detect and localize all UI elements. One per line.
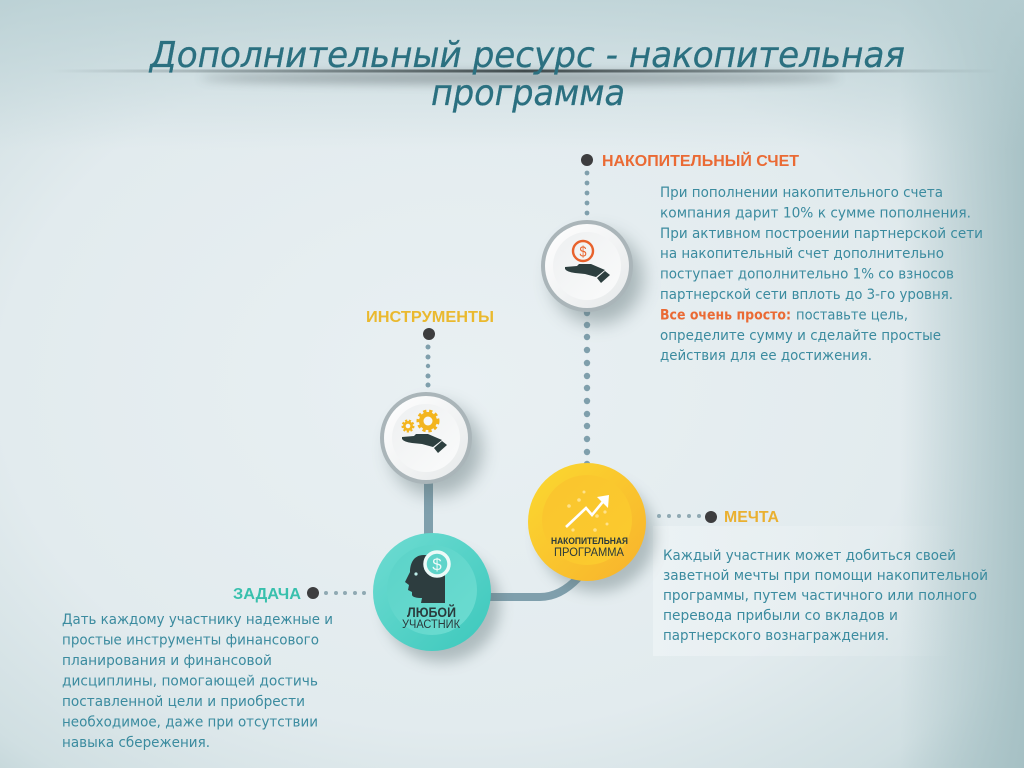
heading: tools: ИНСТРУМЕНТЫ [366,309,494,326]
text: task: простые инструменты финансового [62,632,319,648]
text: savings account: поступает дополнительно 1% со взносов [660,266,954,283]
text: dream: партнерского вознаграждения. [663,627,889,644]
icon: growth arrow [566,490,609,532]
text: savings account: При активном построении партнерской сети [660,225,983,242]
text: task: планирования и финансовой [62,652,272,669]
title: Дополнительный ресурс - накопительная [148,35,905,76]
text: task: поставленной цели и приобрести [62,693,305,710]
header divider with shadow [50,70,1000,84]
icon: head with coin: $ [432,555,442,574]
text: savings account [660,184,983,364]
text: dream: Каждый участник может добиться своей [663,547,956,564]
label: any participant: УЧАСТНИК [402,619,460,631]
marker: account [581,154,593,215]
text: savings account: определите сумму и сделайте простые [660,327,941,344]
text: dream: перевода прибыли со вкладов и [663,607,898,624]
text: task: Дать каждому участнику надежные и [62,611,333,628]
title [148,35,905,114]
text: savings account: действия для ее достижения. [660,347,872,364]
heading: task: ЗАДАЧА [233,586,301,603]
connector: participant to savings programme [486,578,578,597]
icon: gears [402,411,438,432]
icon: hand [402,434,447,453]
title: программа [431,73,625,114]
text: task: дисциплины, помогающей достичь [62,672,318,690]
connector: participant to tools [424,480,433,540]
text: savings account: Все очень просто: [660,306,791,323]
dotted connector: savings programme to account [584,310,590,467]
text: dream [663,547,988,644]
label: savings programme: ПРОГРАММА [554,547,624,559]
text: dream: заветной мечты при помощи накопительной [663,567,988,584]
marker: dream [657,511,717,523]
text: task: навыка сбережения. [62,734,210,751]
text: savings account: партнерской сети вплоть до 3-го уровня. [660,286,953,303]
text: task [62,611,333,751]
light panel behind dream text [653,526,953,656]
text: savings account: поставьте цель, [796,306,908,323]
icon circle: hand with gears [380,392,482,496]
icon: hand [565,264,610,283]
text: savings account: на накопительный счет дополнительно [660,245,944,262]
label: any participant: ЛЮБОЙ [407,603,456,620]
node: any participant [373,533,500,662]
text: task: необходимое, даже при отсутствии [62,714,318,730]
node: savings programme [528,463,655,592]
text: savings account: При пополнении накопительного счета [660,184,943,201]
marker: task [307,587,366,599]
icon: coin: $ [580,244,587,260]
label: any participant [402,603,460,631]
text: dream: программы, путем частичного или полного [663,587,977,604]
label: savings programme: НАКОПИТЕЛЬНАЯ [551,536,628,547]
text: savings account: компания дарит 10% к сумме пополнения. [660,204,971,221]
heading: savings account: НАКОПИТЕЛЬНЫЙ СЧЕТ [602,151,799,170]
icon circle: hand with coin [541,220,643,324]
label: savings programme [551,536,628,559]
heading: dream: МЕЧТА [724,509,779,526]
marker: tools [423,328,435,388]
